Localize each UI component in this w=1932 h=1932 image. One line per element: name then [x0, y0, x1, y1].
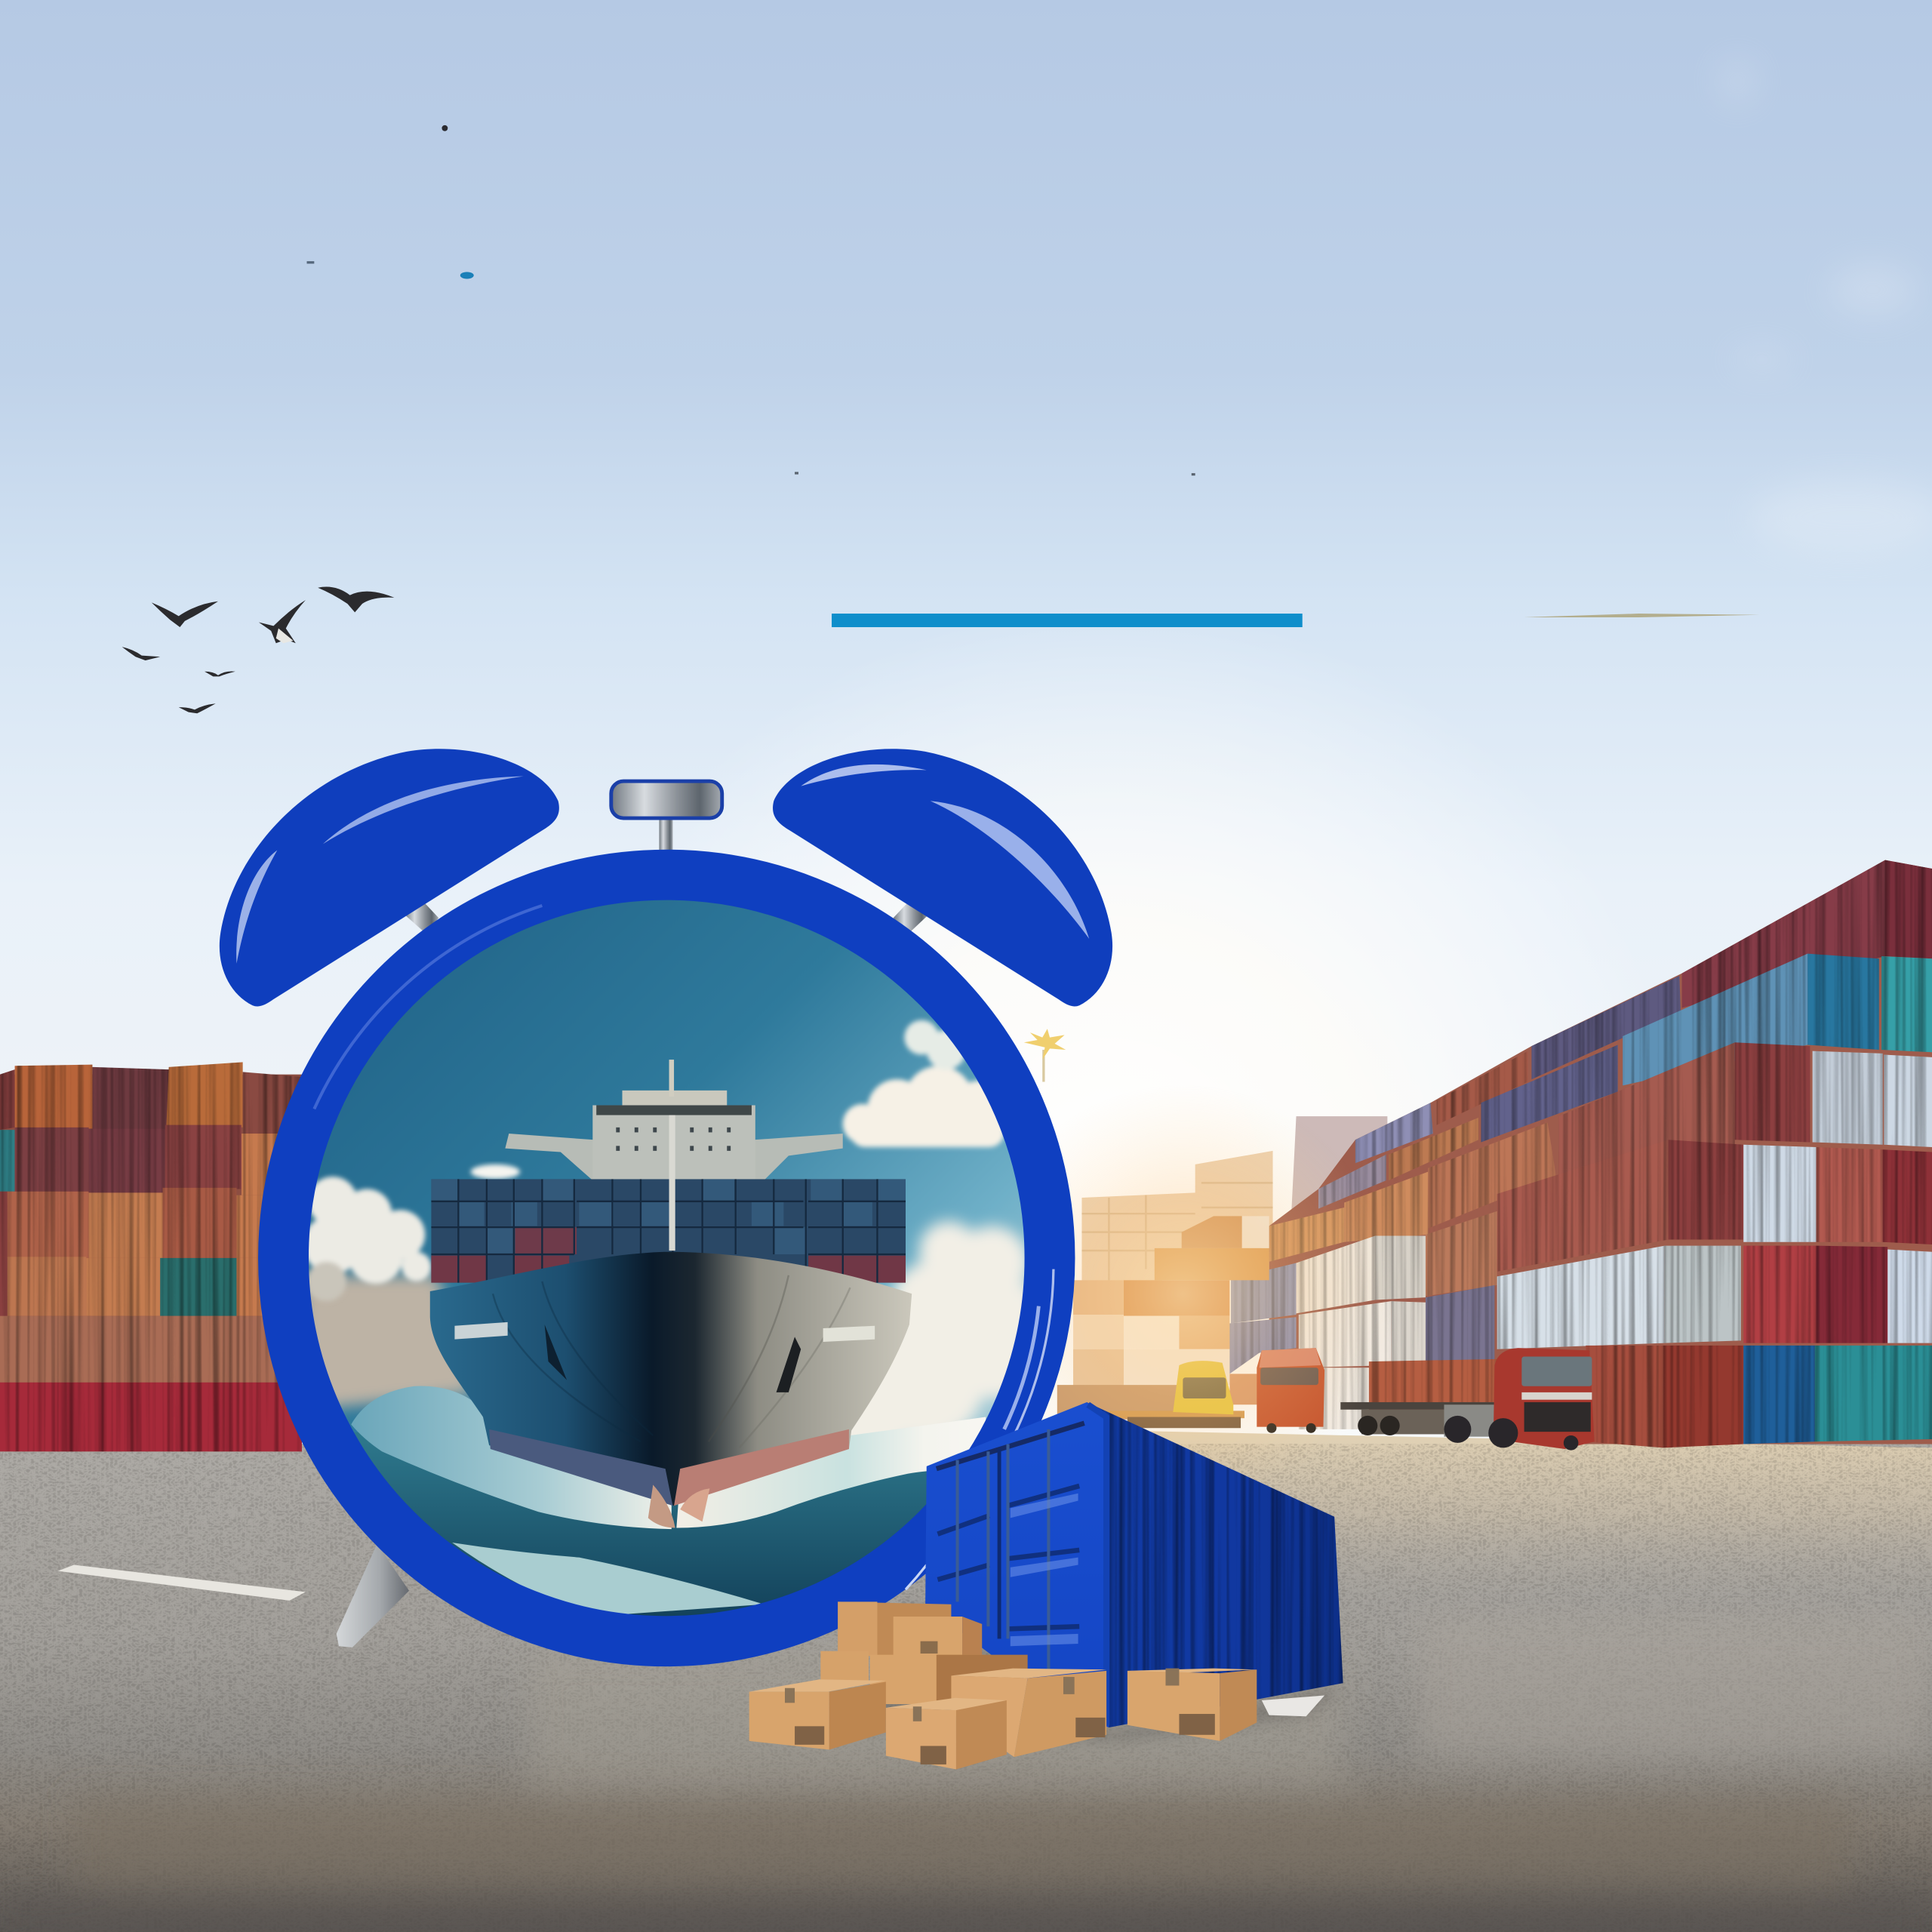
clock foot [337, 1544, 409, 1647]
box large front [951, 1669, 1106, 1757]
box stacked left [820, 1651, 869, 1681]
warm road right [1060, 1429, 1932, 1601]
bell posts [405, 900, 929, 934]
face sky [309, 900, 1025, 1432]
ground [0, 1444, 1932, 1932]
left container stack [0, 1062, 302, 1451]
sun glow [370, 592, 1725, 1478]
road marking [58, 1564, 306, 1601]
sky background [0, 0, 1932, 1478]
ground shadow under container [863, 1601, 1346, 1740]
left lower haze [302, 1275, 475, 1411]
back rows of containers [1229, 860, 1932, 1447]
ship container stacks [431, 1179, 906, 1283]
cardboard boxes [749, 1601, 1257, 1769]
box left front [749, 1679, 886, 1749]
hull waterline right [674, 1429, 849, 1506]
right container yard [1057, 860, 1932, 1451]
box front center [886, 1698, 1007, 1769]
mast [669, 1115, 675, 1251]
box back top [838, 1601, 951, 1656]
container side [1087, 1402, 1343, 1727]
foam swell left [351, 1386, 672, 1529]
right bell [773, 749, 1112, 1006]
upper right cloud [843, 1020, 1011, 1147]
yard flatbeds [1057, 1385, 1244, 1428]
lower right cloud [851, 1211, 1025, 1435]
blue shipping container [925, 1402, 1343, 1727]
ring highlights [314, 906, 1054, 1589]
wispy clouds [1720, 59, 1932, 555]
box back small [894, 1617, 982, 1656]
knob [611, 781, 722, 818]
hull [430, 1252, 912, 1506]
sunlit containers [1073, 1216, 1303, 1404]
distant buildings [1081, 1116, 1387, 1306]
smooth patches on ground [0, 1614, 1932, 1932]
sun wash over yard [974, 1084, 1392, 1503]
left bell [220, 749, 559, 1006]
foreground foam [452, 1543, 764, 1617]
bow spray [648, 1484, 709, 1527]
face clouds [302, 1020, 1054, 1466]
clock face scene [296, 888, 1054, 1626]
specks in sky [307, 125, 1195, 475]
small palm tree [1024, 1029, 1066, 1081]
orange truck [1257, 1348, 1324, 1433]
alarm clock [220, 749, 1112, 1647]
left cloud [303, 1177, 431, 1301]
knob stem [659, 814, 672, 853]
thin streak [1524, 614, 1759, 617]
hull waterline left [489, 1429, 672, 1506]
pavement texture [0, 1444, 1932, 1932]
hull markings [454, 1322, 875, 1392]
box middle [870, 1655, 1028, 1704]
box right [1128, 1669, 1257, 1741]
flock of birds [122, 587, 394, 713]
door hardware [937, 1404, 1106, 1725]
red truck with trailer [1340, 1348, 1595, 1451]
sea [354, 1432, 927, 1617]
clock ring [284, 875, 1050, 1641]
yellow truck [1173, 1361, 1233, 1414]
hull ribs [493, 1275, 851, 1447]
stack backing [1269, 860, 1932, 1444]
superstructure [505, 1060, 843, 1182]
container front [925, 1402, 1109, 1727]
pale sheet by container [1262, 1696, 1324, 1716]
foam swell right [676, 1417, 986, 1527]
accent bar [832, 614, 1303, 627]
door highlights [1011, 1494, 1078, 1646]
